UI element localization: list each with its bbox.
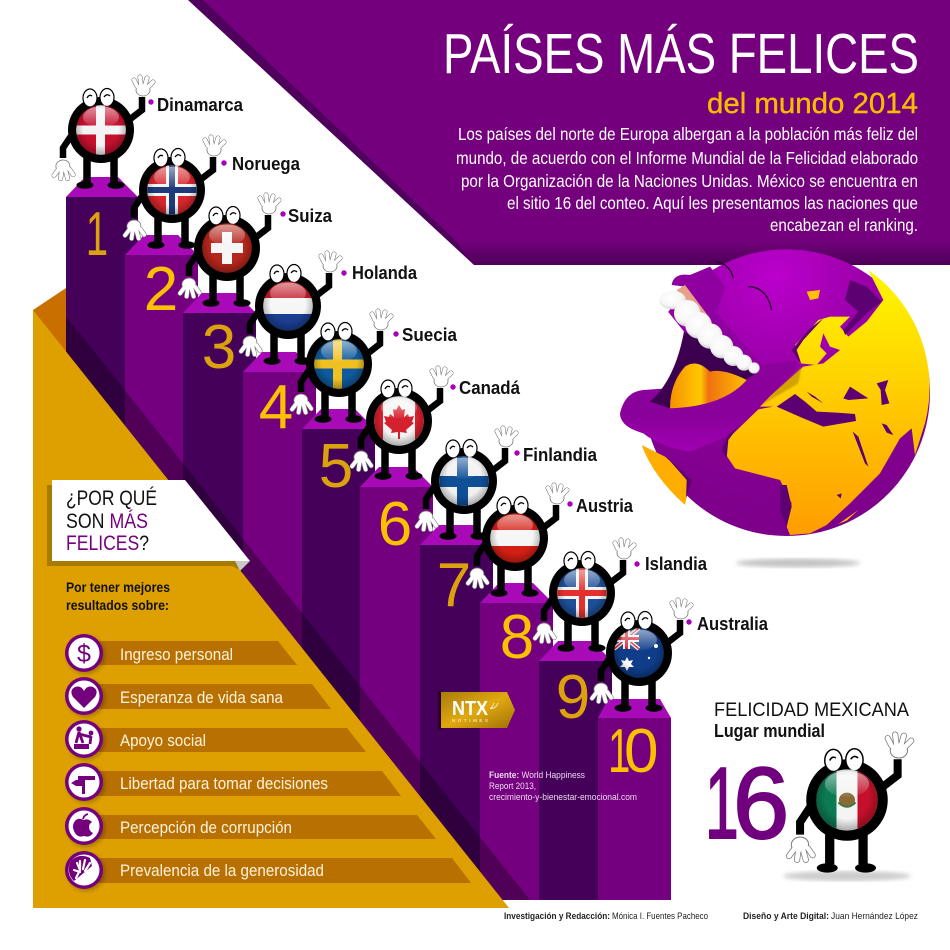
footer credits bbox=[504, 911, 918, 922]
character: Australia bbox=[590, 600, 769, 712]
footer credits: Investigación y Redacción: bbox=[504, 911, 610, 922]
column 9: 9 bbox=[556, 663, 590, 732]
source note bbox=[489, 770, 637, 802]
land: tips and islands bbox=[807, 290, 858, 524]
column 8: 8 bbox=[500, 603, 534, 672]
column 1 bbox=[66, 177, 138, 900]
intro text: reasons bbox=[66, 580, 170, 613]
column 5 bbox=[302, 409, 375, 900]
character: Canada bbox=[350, 368, 521, 480]
column 4: 4 bbox=[259, 373, 293, 442]
footer credits: Mónica I. Fuentes Pacheco bbox=[612, 911, 708, 922]
character: Suiza bbox=[178, 195, 333, 307]
reason: apoyo social bbox=[65, 720, 366, 760]
badge: NTX Notimex bbox=[438, 690, 515, 730]
column 7: 7 bbox=[437, 551, 471, 620]
reason: apoyo social: Apoyo social bbox=[120, 731, 206, 750]
diagonal column shadow bbox=[66, 316, 530, 900]
number 16: 1 bbox=[705, 747, 739, 860]
footer credits: Diseño y Arte Digital: bbox=[743, 911, 829, 922]
character: Islandia bbox=[533, 540, 708, 652]
land: South America bbox=[642, 445, 690, 505]
upper lip bbox=[672, 267, 762, 365]
gum bbox=[677, 285, 710, 318]
character: Canada: Canadá bbox=[459, 377, 521, 398]
reason: percepcion de corrupcion bbox=[65, 807, 436, 847]
callout: por que son mas felices bbox=[47, 480, 250, 571]
panel: gold reasons bbox=[33, 310, 509, 908]
reason: libertad: Libertad para tomar decisiones bbox=[120, 774, 328, 793]
column 7 bbox=[420, 525, 493, 900]
callout: por que son mas felices: SON MÁS bbox=[66, 508, 148, 533]
reason: esperanza de vida sana: Esperanza de vida sana bbox=[120, 688, 283, 707]
column 3: 3 bbox=[202, 313, 236, 382]
intro text: reasons: Por tener mejores bbox=[66, 580, 170, 595]
column 4 bbox=[243, 352, 316, 900]
illustration: laughing globe bbox=[620, 249, 930, 536]
column 2: 2 bbox=[144, 255, 178, 324]
column 3 bbox=[183, 293, 256, 900]
column 8 bbox=[480, 583, 553, 900]
character: Austria bbox=[466, 485, 634, 597]
character: Dinamarca: Dinamarca bbox=[157, 94, 244, 115]
character: Noruega: Noruega bbox=[232, 153, 301, 174]
character: Noruega bbox=[123, 137, 301, 249]
footer credits: Juan Hernández López bbox=[831, 911, 918, 922]
character: Islandia: Islandia bbox=[645, 553, 708, 574]
source note: Fuente: World Happiness bbox=[489, 770, 585, 780]
column 10 bbox=[598, 699, 671, 900]
reason: percepcion de corrupcion: Percepción de corrupción bbox=[120, 818, 292, 837]
column 10: 0 bbox=[624, 717, 658, 786]
intro text: reasons: resultados sobre: bbox=[66, 598, 169, 613]
intro text bbox=[456, 124, 918, 235]
column 6: 6 bbox=[378, 490, 412, 559]
eye creases bbox=[715, 262, 772, 310]
mouth interior bbox=[650, 332, 758, 408]
subtitle: del mundo 2014 bbox=[707, 88, 918, 120]
reason: esperanza de vida sana bbox=[65, 677, 331, 717]
character: Suecia bbox=[290, 311, 458, 423]
character: Finlandia bbox=[415, 428, 598, 540]
character: Suiza: Suiza bbox=[288, 205, 333, 226]
reason: ingreso personal: $ bbox=[77, 640, 91, 668]
inland seas and coasts bbox=[663, 280, 893, 527]
shadow under lip bbox=[758, 367, 802, 407]
column 2 bbox=[125, 235, 198, 900]
reason: generosidad bbox=[65, 851, 471, 891]
tongue bbox=[670, 363, 747, 408]
heading: felicidad mexicana: Lugar mundial bbox=[714, 720, 825, 741]
land: Eurasia and Africa bbox=[725, 270, 930, 535]
column 10: 1 bbox=[608, 717, 630, 786]
lower lip bbox=[620, 361, 797, 452]
column 5: 5 bbox=[319, 432, 353, 501]
character: Finlandia: Finlandia bbox=[523, 444, 598, 465]
badge: NTX Notimex: NTX bbox=[452, 698, 489, 720]
badge: NTX Notimex: NOTIMEX bbox=[452, 718, 488, 723]
callout: por que son mas felices: ¿POR QUÉ bbox=[66, 485, 157, 510]
number 16 bbox=[705, 747, 789, 860]
orange back edge of gold panel bbox=[33, 288, 66, 380]
intro text: encabezan el ranking. bbox=[770, 215, 918, 235]
character: Mexico bbox=[783, 735, 911, 881]
reason: libertad bbox=[65, 763, 401, 803]
reason: ingreso personal bbox=[65, 634, 297, 674]
white cut-out left of the mouth bbox=[620, 283, 684, 393]
heading: felicidad mexicana: FELICIDAD MEXICANA bbox=[714, 700, 909, 721]
source note: Report 2013, bbox=[489, 781, 536, 791]
number 16: 6 bbox=[733, 748, 789, 860]
character: Dinamarca bbox=[52, 77, 244, 189]
reason: ingreso personal: Ingreso personal bbox=[120, 645, 233, 664]
teeth bbox=[659, 291, 760, 374]
column 9 bbox=[539, 641, 612, 900]
character: Australia: Australia bbox=[697, 613, 769, 634]
character: Holanda: Holanda bbox=[352, 262, 418, 283]
panel: header bbox=[188, 0, 950, 265]
callout: por que son mas felices: FELICES? bbox=[66, 531, 149, 555]
globe shadow bbox=[736, 558, 860, 568]
reason: generosidad: Prevalencia de la generosidad bbox=[120, 861, 324, 880]
character: Suecia: Suecia bbox=[402, 324, 458, 345]
column 1: 1 bbox=[86, 200, 108, 269]
column 6 bbox=[360, 467, 433, 900]
character: Austria: Austria bbox=[576, 495, 634, 516]
heading: felicidad mexicana bbox=[714, 700, 909, 741]
character: Holanda bbox=[239, 253, 418, 365]
source note: crecimiento-y-bienestar-emocional.com bbox=[489, 792, 637, 802]
